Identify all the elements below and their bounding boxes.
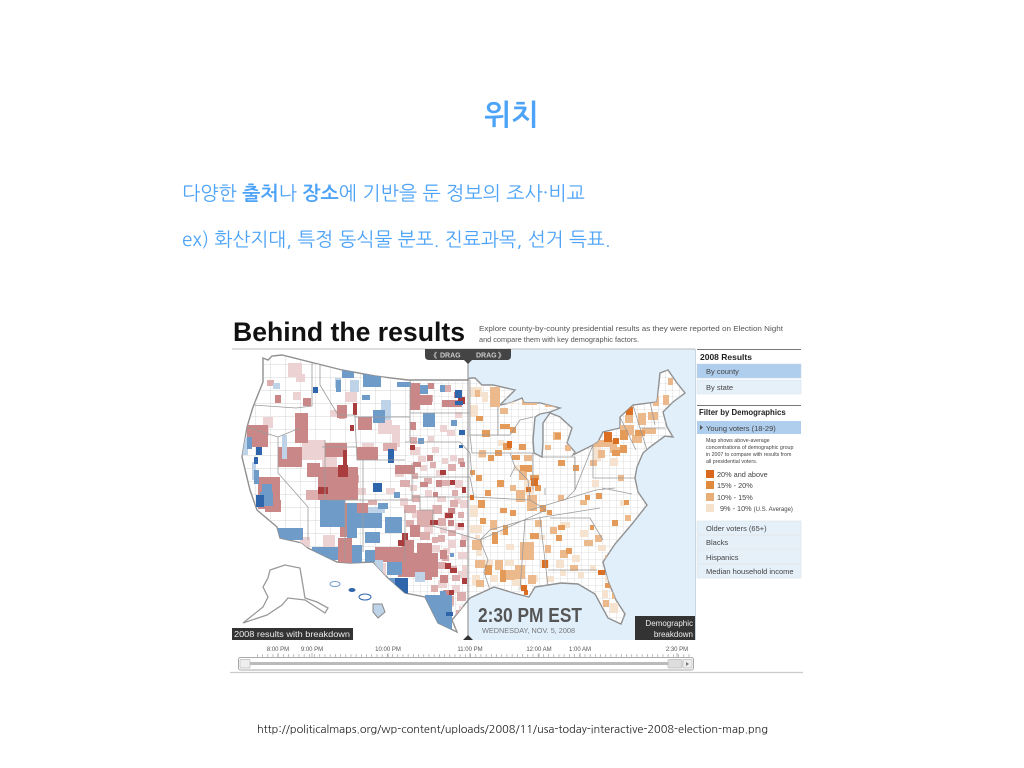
map: United States landmass	[232, 349, 698, 640]
map: state borders	[247, 361, 665, 590]
text block: examples: ex) 화산지대, 특정 동식물 분포. 진료과목, 선거 득표.	[182, 230, 611, 249]
sidebar: filter by demographics: in 2007 to compare with results from	[706, 452, 792, 458]
sidebar: filter by demographics: Young voters (18-29)	[706, 424, 776, 433]
sidebar: demographic buttons	[697, 521, 801, 578]
label: Demographic breakdown: breakdown	[654, 630, 693, 639]
map: demographic counties (right half)	[470, 378, 673, 613]
sidebar: filter by demographics: Map shows above-average	[706, 438, 770, 444]
divider with drag handle: 《	[430, 352, 437, 360]
timeline slider: 9:00 PM	[301, 647, 323, 653]
header: Behind the results: Explore county-by-county presidential results as they were reported on Election Night	[479, 324, 783, 333]
clock: 2:30 PM EST	[478, 605, 582, 635]
divider with drag handle: DRAG	[440, 352, 461, 360]
timeline slider: 10:00 PM	[375, 647, 401, 653]
divider with drag handle	[425, 349, 511, 640]
header: Behind the results	[233, 317, 783, 347]
sidebar: legend: 9% - 10% (U.S. Average)	[720, 504, 793, 513]
sidebar: filter by demographics: concentrations of demographic group	[706, 445, 794, 451]
sidebar: legend: 15% - 20%	[717, 481, 753, 490]
clock: 2:30 PM EST: WEDNESDAY, NOV. 5, 2008	[482, 626, 575, 635]
title: 위치	[484, 102, 539, 130]
sidebar: 2008 results: 2008 Results	[700, 352, 752, 362]
sidebar: legend: 20% and above	[717, 470, 768, 479]
divider with drag handle: DRAG	[476, 352, 497, 360]
source URL: http://politicalmaps.org/wp-content/uploads/2008/11/usa-today-interactive-2008-election-map.png	[257, 724, 768, 735]
header: Behind the results: and compare them with key demographic factors.	[479, 335, 639, 344]
map: election results counties (left half)	[240, 363, 468, 630]
timeline slider: 11:00 PM	[457, 647, 483, 653]
sidebar: filter by demographics: all presidential voters.	[706, 459, 757, 465]
clock: 2:30 PM EST: 2:30 PM EST	[478, 605, 582, 627]
sidebar: 2008 results: By county	[706, 367, 739, 376]
text block: definition: 다양한 출처나 장소에 기반을 둔 정보의 조사·비교	[182, 183, 585, 203]
map panel background	[232, 349, 696, 640]
timeline slider: 2:30 PM	[666, 647, 688, 653]
map: Alaska and Hawaii	[243, 565, 385, 623]
timeline slider: 1:00 AM	[569, 647, 591, 653]
sidebar: demographic buttons: Blacks	[706, 538, 728, 547]
sidebar: demographic buttons: Older voters (65+)	[706, 524, 767, 533]
timeline slider	[230, 647, 803, 672]
divider with drag handle: 》	[498, 352, 505, 360]
election map screenshot	[230, 322, 803, 674]
sidebar: 2008 results: By state	[706, 383, 733, 392]
timeline slider: 12:00 AM	[526, 647, 552, 653]
label: 2008 results with breakdown	[232, 628, 353, 640]
sidebar: legend: 10% - 15%	[717, 493, 753, 502]
label: Demographic breakdown	[635, 616, 695, 640]
header: Behind the results: Behind the results	[233, 317, 465, 347]
label: Demographic breakdown: Demographic	[645, 619, 693, 628]
sidebar: filter by demographics: Filter by Demographics	[699, 408, 786, 417]
timeline slider: 8:00 PM	[267, 647, 289, 653]
sidebar: demographic buttons: Median household income	[706, 567, 794, 576]
label: 2008 results with breakdown: 2008 results with breakdown	[234, 630, 350, 639]
sidebar: demographic buttons: Hispanics	[706, 553, 739, 562]
sidebar: legend	[706, 470, 793, 513]
sidebar: filter by demographics	[697, 406, 801, 465]
sidebar: 2008 results	[697, 350, 801, 394]
